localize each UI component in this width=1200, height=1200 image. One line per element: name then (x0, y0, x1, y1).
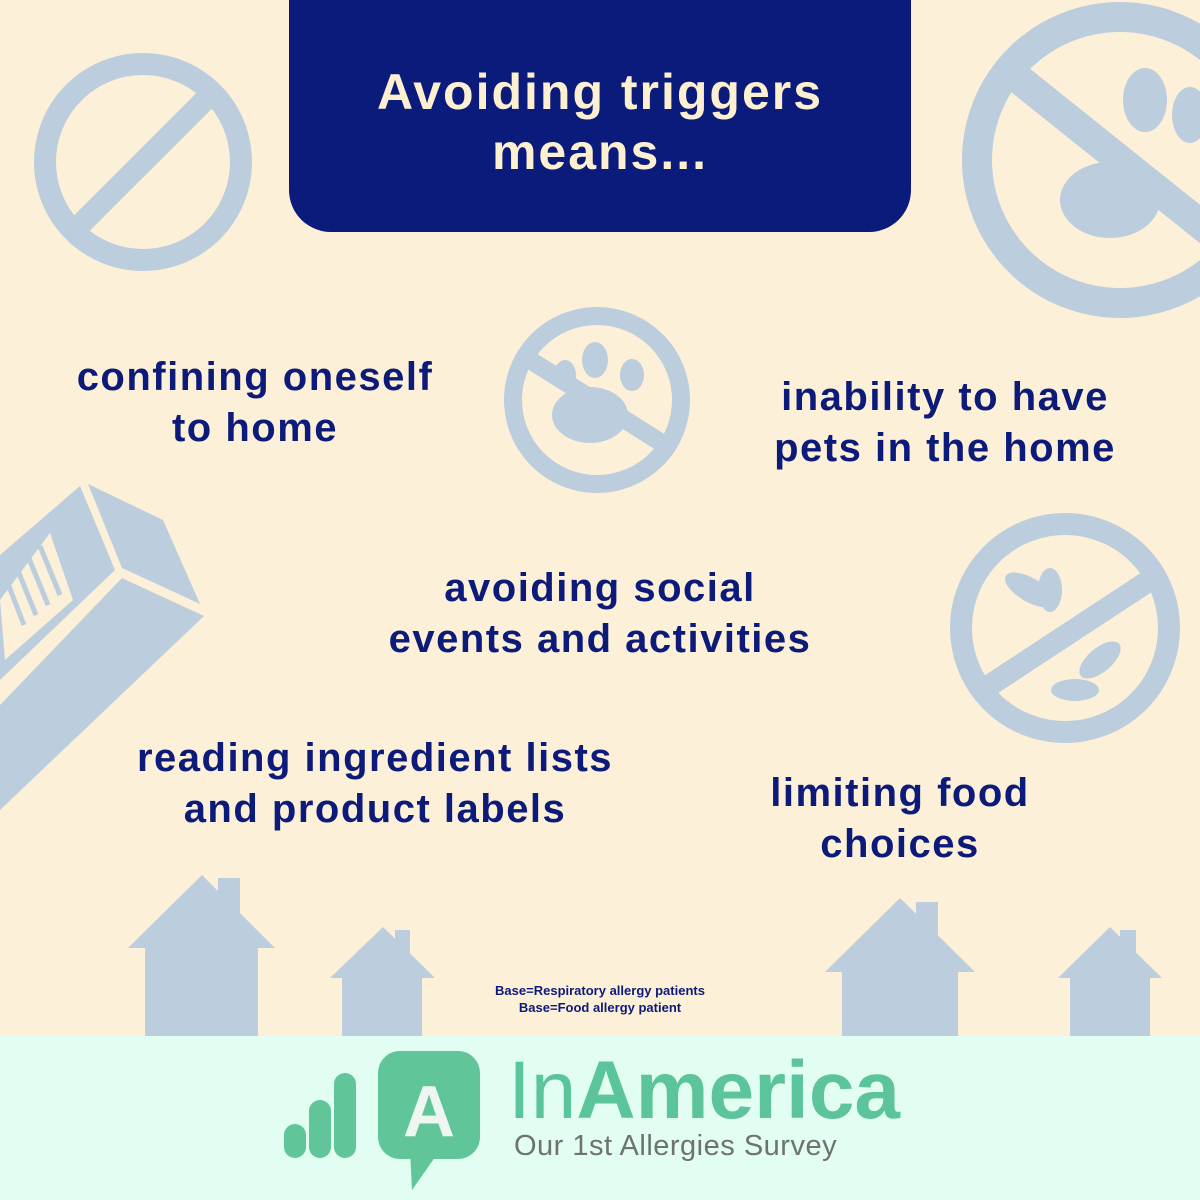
icon: no pets middle (513, 316, 681, 484)
text: confining (77, 355, 433, 450)
title box: Avoiding triggers (377, 64, 823, 120)
text: social: avoiding social (444, 566, 756, 610)
text: pets (774, 375, 1116, 470)
text: food (770, 771, 1030, 866)
text: confining: confining oneself (77, 355, 433, 399)
base note: Base=Food allergy patient (519, 1000, 681, 1015)
base note: Base=Respiratory allergy patients (495, 983, 705, 998)
logo text: InAmerica (508, 1045, 900, 1136)
text: social: events and activities (389, 617, 811, 661)
text: food: limiting food (770, 771, 1030, 815)
logo icon: A (403, 1072, 455, 1152)
logo icon (284, 1051, 480, 1190)
icon: no plants right (961, 524, 1169, 732)
text: social (389, 566, 811, 661)
title box (289, 0, 911, 232)
text: food: choices (820, 822, 980, 866)
text: reading: reading ingredient lists (137, 736, 613, 780)
text: confining: to home (172, 406, 338, 450)
title box: means... (492, 124, 708, 180)
icon: product box (0, 484, 204, 810)
text: pets: pets in the home (774, 426, 1116, 470)
text: reading: and product labels (184, 787, 566, 831)
text: pets: inability to have (781, 375, 1109, 419)
footer (0, 1036, 1200, 1200)
text: reading (137, 736, 613, 831)
icon: prohibition circle top-left (45, 64, 241, 260)
icon: no pets top-right (977, 17, 1200, 303)
base note (495, 983, 705, 1015)
footer: Our 1st Allergies Survey (514, 1130, 837, 1162)
icon: houses (128, 875, 1162, 1036)
